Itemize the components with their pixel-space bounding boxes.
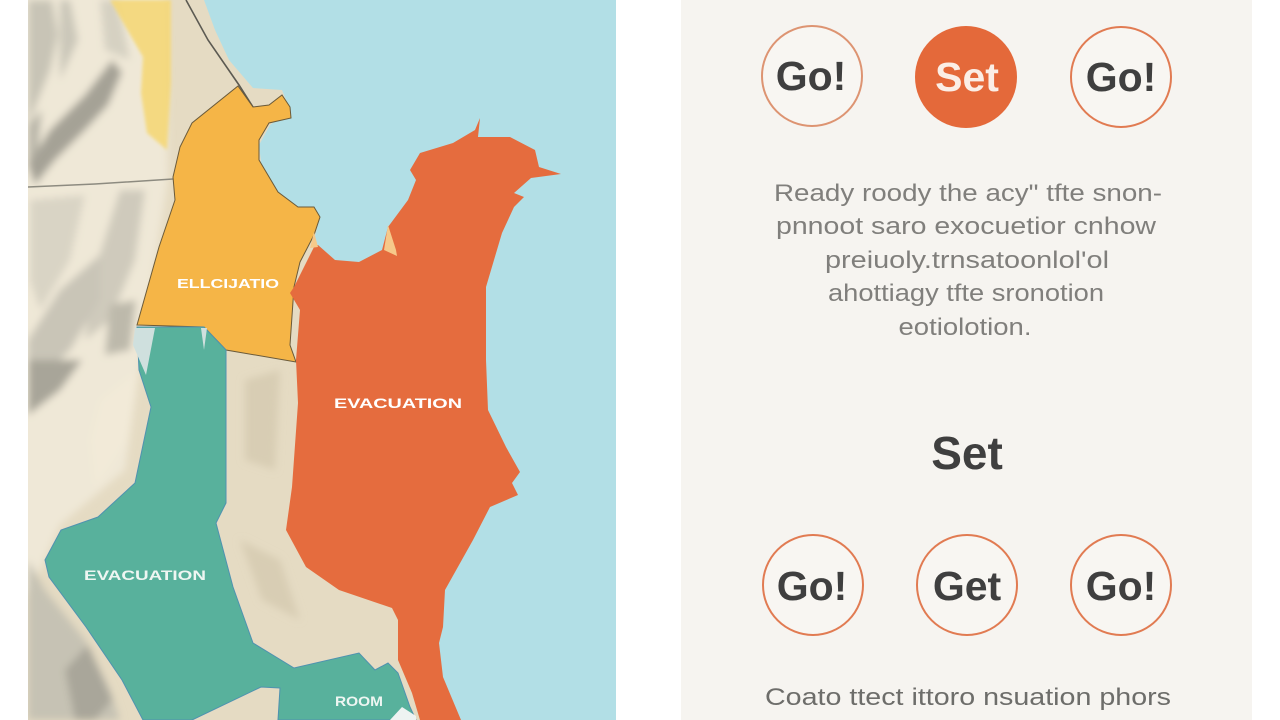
icon: bottom go right xyxy=(1071,535,1171,635)
icon: top set: Set xyxy=(935,54,999,100)
label: teal zone: EVACUATION xyxy=(84,567,206,583)
yellow zone strip xyxy=(110,0,171,150)
icon: bottom go left xyxy=(763,535,863,635)
text block: description: ahottiagy tfte sronotion xyxy=(828,280,1104,307)
light notches xyxy=(133,328,155,375)
icon: bottom get xyxy=(917,535,1017,635)
text block: description: pnnoot saro exocuetior cnhow xyxy=(776,213,1157,240)
boundary line xyxy=(186,0,253,107)
text block: footer: Coato ttect ittoro nsuation phors xyxy=(765,684,1171,711)
light patch xyxy=(384,225,397,256)
heading: set: Set xyxy=(931,427,1003,479)
land terrain xyxy=(20,0,420,720)
text block: description: Ready roody the acy" tfte snon- xyxy=(774,180,1162,207)
icon: bottom go right: Go! xyxy=(1086,563,1156,609)
icon: top go right: Go! xyxy=(1086,54,1156,100)
yellow-orange zone xyxy=(137,86,320,362)
icon: bottom get: Get xyxy=(933,563,1002,609)
label: bottom zone: ROOM xyxy=(335,693,383,709)
red-orange zone xyxy=(286,118,561,720)
text block: description: eotiolotion. xyxy=(898,314,1032,341)
ocean xyxy=(204,0,616,720)
icon: top go left xyxy=(762,26,862,126)
icon: bottom go left: Go! xyxy=(777,563,847,609)
icon: top set xyxy=(915,26,1017,128)
label: orange zone: ELLCIJATIO xyxy=(177,276,279,291)
text block: description xyxy=(774,180,1162,341)
teal zone xyxy=(45,327,416,720)
icon: top go right xyxy=(1071,27,1171,127)
panel: ready set go xyxy=(681,0,1252,720)
text block: description: preiuoly.trnsatoonlol'ol xyxy=(825,247,1109,274)
panel: evacuation map xyxy=(20,0,616,720)
icon: top go left: Go! xyxy=(776,53,846,99)
label: red zone: EVACUATION xyxy=(334,395,462,411)
